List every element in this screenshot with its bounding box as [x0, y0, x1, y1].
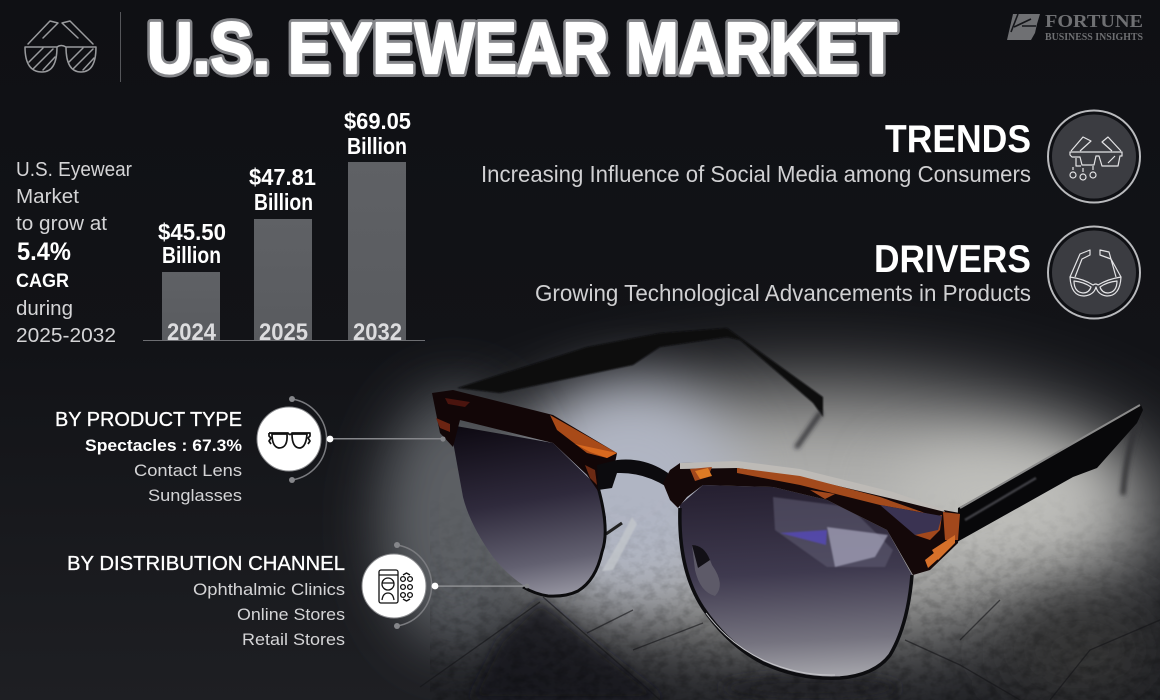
- bar 2025: Billion: [254, 189, 313, 215]
- bar 2024: Billion: [162, 242, 221, 268]
- trends text: TRENDS: [885, 118, 1031, 161]
- distribution channel text: [67, 553, 345, 649]
- bar 2032: 2032: [353, 319, 402, 346]
- distribution channel text: Online Stores: [237, 605, 345, 624]
- icon: product type connector: [257, 396, 446, 483]
- shadow below left lens: [470, 600, 665, 700]
- right brow frame: [663, 462, 960, 575]
- product type text: Spectacles : 67.3%: [85, 436, 242, 455]
- product type text: Sunglasses: [148, 486, 242, 505]
- distribution channel text: Ophthalmic Clinics: [193, 580, 345, 599]
- far temple arm: [457, 328, 823, 448]
- bar 2032: [344, 108, 411, 346]
- CAGR text block: 2025-2032: [16, 325, 116, 347]
- left lens: [450, 425, 606, 596]
- title: U.S. EYEWEAR MARKET: [147, 9, 897, 89]
- bridge: [597, 460, 668, 490]
- CAGR text block: U.S. Eyewear: [16, 159, 132, 181]
- trends text: Increasing Influence of Social Media among Consumers: [481, 161, 1031, 187]
- bar 2024: 2024: [167, 319, 217, 346]
- icon: distribution connector: [362, 542, 529, 629]
- CAGR text block: CAGR: [16, 271, 69, 292]
- distribution channel text: BY DISTRIBUTION CHANNEL: [67, 553, 345, 575]
- drivers text: DRIVERS: [874, 238, 1031, 281]
- bar 2025: [249, 164, 316, 346]
- CAGR text block: Market: [16, 186, 79, 208]
- distribution channel text: Retail Stores: [242, 630, 345, 649]
- near temple shadow: [1123, 423, 1137, 495]
- bar 2024: [158, 219, 226, 346]
- right lens: [680, 485, 912, 678]
- trends text: [481, 118, 1031, 187]
- CAGR text block: [16, 159, 132, 347]
- bar 2032: Billion: [347, 133, 407, 159]
- drivers text: Growing Technological Advancements in Products: [535, 280, 1031, 306]
- photo background: dark leather surface: [0, 317, 1160, 700]
- title icon: sunglasses: [25, 21, 96, 72]
- drivers text: [535, 238, 1031, 306]
- bar 2032: $69.05: [344, 108, 411, 134]
- bar 2025: 2025: [259, 319, 308, 346]
- icon: cat-eye glasses: [1048, 226, 1140, 318]
- near temple arm: [957, 405, 1143, 542]
- CAGR text block: to grow at: [16, 213, 107, 235]
- left brow frame: [432, 390, 617, 491]
- product type text: [55, 409, 242, 505]
- bar chart: [143, 108, 425, 346]
- product type text: Contact Lens: [134, 461, 242, 480]
- logo: Fortune Business Insights: [1007, 11, 1143, 43]
- icon: smart glasses: [1048, 110, 1140, 202]
- bar 2024: $45.50: [158, 219, 226, 245]
- logo: Fortune Business Insights: FORTUNE: [1045, 11, 1143, 31]
- sunglasses photo: [432, 328, 1143, 678]
- bar 2025: $47.81: [249, 164, 316, 190]
- product type text: BY PRODUCT TYPE: [55, 409, 242, 431]
- logo: Fortune Business Insights: BUSINESS INSIGHTS: [1045, 32, 1143, 43]
- CAGR text block: during: [16, 298, 73, 320]
- shadow below right lens: [720, 676, 900, 700]
- title: U.S. EYEWEAR MARKET: [147, 9, 897, 89]
- nose pad: [602, 517, 637, 571]
- title divider: [120, 12, 121, 82]
- CAGR text block: 5.4%: [17, 238, 71, 266]
